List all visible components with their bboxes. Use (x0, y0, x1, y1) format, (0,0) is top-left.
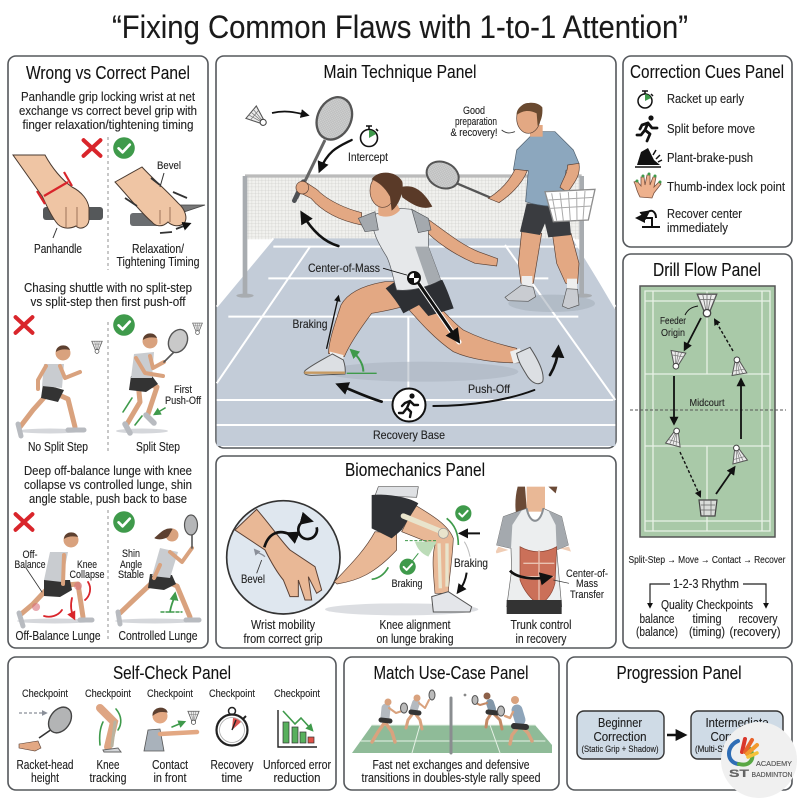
heading: main technique: Main Technique Panel (324, 62, 476, 82)
box: beginner correction: Beginner (598, 715, 643, 730)
cue: plant-brake-push: Plant-brake-push (667, 151, 753, 165)
illustration: panhandle grip (13, 155, 103, 238)
label: knee collapse: Knee (77, 559, 97, 571)
label: first push-off (165, 384, 202, 407)
checkpoint: balance: balance (640, 612, 675, 626)
description: lunge: collapse vs controlled lunge, shin (24, 478, 192, 492)
box: intermediate correction: Intermediate (706, 715, 768, 730)
cue: recover center immediately: Recover center (667, 207, 742, 221)
caption: knee tracking: Knee (96, 758, 120, 772)
box: beginner correction (577, 711, 664, 759)
heading: self-check: Self-Check Panel (113, 663, 231, 683)
illustration: bevel grip (115, 167, 205, 233)
box: beginner correction: Correction (594, 729, 646, 744)
caption: knee tracking (90, 758, 127, 785)
caption: contact in front: Contact (152, 758, 188, 772)
box: beginner correction: (Static Grip + Shadow) (582, 744, 658, 754)
checkpoint labels: Checkpoint (85, 688, 131, 700)
angle marker (347, 351, 377, 373)
caption: wrist (244, 617, 322, 646)
panel: match use-case (344, 657, 559, 790)
icon: contact in front (144, 708, 197, 751)
checkpoint labels: Checkpoint (274, 688, 320, 700)
checkpoint: timing: (timing) (689, 625, 725, 639)
heading: progression: Progression Panel (616, 663, 742, 683)
cue: thumb-index lock point: Thumb-index lock point (667, 180, 785, 194)
icon: shuttle (246, 106, 271, 131)
panel: drill flow (623, 254, 792, 648)
label: split step: Split Step (136, 440, 180, 454)
heading: wrong vs correct: Wrong vs Correct Panel (26, 63, 190, 83)
heading: drill flow: Drill Flow Panel (653, 260, 761, 280)
caption: recovery time: Recovery (210, 758, 254, 772)
cue: split before move: Split before move (667, 122, 755, 136)
label: good preparation and recovery (450, 105, 498, 139)
court diagram (630, 286, 786, 537)
arrows: swing and lunge path (302, 140, 558, 406)
arrow: shuttle to racket (272, 112, 307, 115)
label: controlled lunge: Controlled Lunge (118, 629, 198, 643)
label: center-of-mass transfer (566, 568, 608, 601)
label: quality checkpoints: Quality Checkpoints (661, 598, 753, 612)
label: off-balance: Off- (22, 549, 38, 561)
icon: shuttle (92, 341, 102, 353)
label: braking lower: Braking (392, 578, 422, 590)
caption: knee: Knee alignment (380, 617, 451, 632)
icon: knee tracking (100, 708, 121, 752)
description: grip: Panhandle grip locking wrist at net (21, 90, 195, 104)
caption: contact in front (152, 758, 188, 785)
coach figure (422, 103, 595, 312)
box: intermediate correction: Correction (710, 729, 764, 744)
label: intercept: Intercept (348, 150, 389, 164)
description: grip (19, 90, 197, 132)
caption: unforced error reduction: Unforced error (263, 758, 331, 772)
watermark logo: BADMINTON (752, 772, 792, 779)
label: feeder origin: Origin (661, 327, 685, 339)
label: first push-off: Push-Off (165, 395, 202, 407)
box: intermediate correction: (Multi-Shuttle Reaction) (695, 744, 779, 754)
icon: hand (634, 172, 662, 198)
title: “Fixing Common Flaws with 1-to-1 Attention” (112, 9, 688, 45)
label: knee collapse: Collapse (70, 569, 104, 581)
label: shin angle stable: Angle (120, 559, 142, 571)
watermark logo: ST (729, 768, 749, 780)
arrow: to intermediate (667, 734, 684, 736)
checkpoint: timing: timing (692, 612, 722, 626)
watermark logo: ACADEMY (756, 761, 792, 768)
label: rhythm: 1-2-3 Rhythm (673, 577, 739, 591)
checkpoint labels: Checkpoint (209, 688, 255, 700)
caption: knee: on lunge braking (376, 631, 454, 646)
label: panhandle: Panhandle (34, 242, 82, 256)
label: center-of-mass transfer: Mass (576, 578, 598, 590)
bracket arrows (650, 584, 766, 607)
description: lunge: Deep off-balance lunge with knee (24, 464, 192, 478)
label: recovery base: Recovery Base (373, 428, 445, 442)
caption: trunk: in recovery (516, 631, 567, 646)
checkpoint: balance (636, 612, 678, 639)
icon: stopwatch (638, 91, 653, 108)
cue: racket up early: Racket up early (667, 92, 745, 106)
icon: correct mark split (113, 314, 135, 336)
label: bevel: Bevel (157, 160, 181, 172)
checkpoint labels (22, 688, 320, 700)
description: lunge (24, 464, 192, 506)
description: split step: Chasing shuttle with no split-step (24, 281, 192, 295)
checkpoint: timing (689, 612, 725, 639)
label: good preparation and recovery: preparation (455, 116, 497, 128)
label: no split step: No Split Step (28, 440, 88, 454)
checkpoint labels: Checkpoint (147, 688, 193, 700)
checkpoint: balance: (balance) (636, 625, 678, 639)
panel: main technique (216, 56, 616, 448)
caption: trunk (510, 617, 572, 646)
panel: progression (567, 657, 792, 790)
caption: contact in front: in front (154, 771, 187, 785)
checkpoint: recovery (730, 612, 780, 639)
label: feeder origin: Feeder (660, 315, 686, 327)
cue: recover center immediately (667, 207, 742, 235)
label: relaxation timing: Tightening Timing (116, 255, 200, 269)
description: split step: vs split-step then first push-off (30, 295, 186, 309)
figure: off-balance lunge (17, 532, 93, 626)
label: midcourt: Midcourt (690, 397, 725, 409)
label: first push-off: First (174, 384, 192, 396)
description: split step (24, 281, 192, 309)
panel: correction cues (623, 56, 792, 247)
label: relaxation timing (116, 242, 200, 269)
description: grip: exchange vs correct bevel grip with (19, 104, 197, 118)
illustration: trunk control (496, 487, 571, 614)
label: bevel: Bevel (241, 572, 265, 586)
label: relaxation timing: Relaxation/ (132, 242, 184, 256)
description: grip: finger relaxation/tightening timing (22, 118, 194, 132)
icon: wrong mark lunge (16, 514, 32, 530)
icon: correct mark lunge (113, 511, 135, 533)
icon: recovery base runner (392, 388, 426, 422)
icon: recover arrows (638, 211, 660, 227)
label: center of mass: Center-of-Mass (308, 261, 380, 275)
icon: correct mark grip (113, 137, 135, 159)
player figure (294, 91, 543, 384)
caption: recovery time: time (222, 771, 243, 785)
caption: unforced error reduction (263, 758, 331, 785)
icon: runner (637, 115, 657, 141)
icon: error chart (278, 710, 317, 747)
label: good preparation and recovery: & recovery! (450, 127, 498, 139)
caption: trunk: Trunk control (510, 617, 572, 632)
label: feeder origin (660, 315, 686, 339)
caption: knee tracking: tracking (90, 771, 127, 785)
checkpoint labels: Checkpoint (22, 688, 68, 700)
label: off-balance lunge: Off-Balance Lunge (16, 629, 101, 643)
caption: recovery time (210, 758, 254, 785)
caption: knee (376, 617, 454, 646)
label: off-balance: Balance (14, 559, 46, 571)
cue: recover center immediately: immediately (667, 221, 729, 235)
icon: stopwatch (360, 126, 378, 146)
caption: match use-case: Fast net exchanges and defensive (372, 758, 530, 772)
icon: plant foot (635, 148, 662, 167)
label: braking: Braking (292, 317, 328, 331)
caption: unforced error reduction: reduction (274, 771, 321, 785)
court and net (217, 176, 615, 446)
label: good preparation and recovery: Good (463, 105, 485, 117)
figure: controlled lunge (115, 515, 199, 624)
icon: wrong mark split (16, 317, 32, 333)
icon: racket head height (19, 703, 76, 751)
doubles court scene (352, 690, 552, 753)
label: push-off: Push-Off (468, 382, 511, 396)
label: shin angle stable: Stable (118, 569, 144, 581)
figure: no split step (18, 345, 84, 436)
label: center-of-mass transfer: Center-of- (566, 568, 608, 580)
caption: match use-case (362, 758, 541, 785)
caption: wrist: from correct grip (244, 631, 322, 646)
icon: recovery stopwatch (216, 708, 248, 746)
checkpoint: recovery: (recovery) (730, 625, 780, 639)
panel: self-check (8, 657, 336, 790)
watermark logo (721, 722, 797, 798)
figure: split step (116, 326, 191, 434)
caption: racket-head height: height (31, 771, 59, 785)
caption: racket-head height: Racket-head (16, 758, 74, 772)
label: knee collapse (70, 559, 104, 581)
panel: wrong vs correct (8, 56, 208, 648)
label: braking right: Braking (454, 556, 488, 570)
label: shin angle stable: Shin (122, 548, 140, 560)
heading: biomechanics: Biomechanics Panel (345, 460, 485, 480)
description: lunge: angle stable, push back to base (29, 492, 187, 506)
box: intermediate correction (691, 711, 783, 759)
illustration: knee alignment (325, 487, 480, 615)
illustration: wrist mobility (227, 501, 340, 614)
icon: shuttle (193, 323, 202, 334)
panel: biomechanics (216, 456, 616, 648)
caption: match use-case: transitions in doubles-style rally speed (362, 771, 541, 785)
heading: match use-case: Match Use-Case Panel (374, 663, 528, 683)
label: off-balance (14, 549, 46, 571)
label: shin angle stable (118, 548, 144, 581)
caption: racket-head height (16, 758, 74, 785)
icon: wrong mark grip (84, 140, 100, 156)
label: center-of-mass transfer: Transfer (570, 589, 604, 601)
checkpoint: recovery: recovery (738, 612, 778, 626)
caption: wrist: Wrist mobility (251, 617, 315, 632)
icon: shuttle (188, 711, 199, 724)
marker: center of mass (408, 272, 420, 284)
